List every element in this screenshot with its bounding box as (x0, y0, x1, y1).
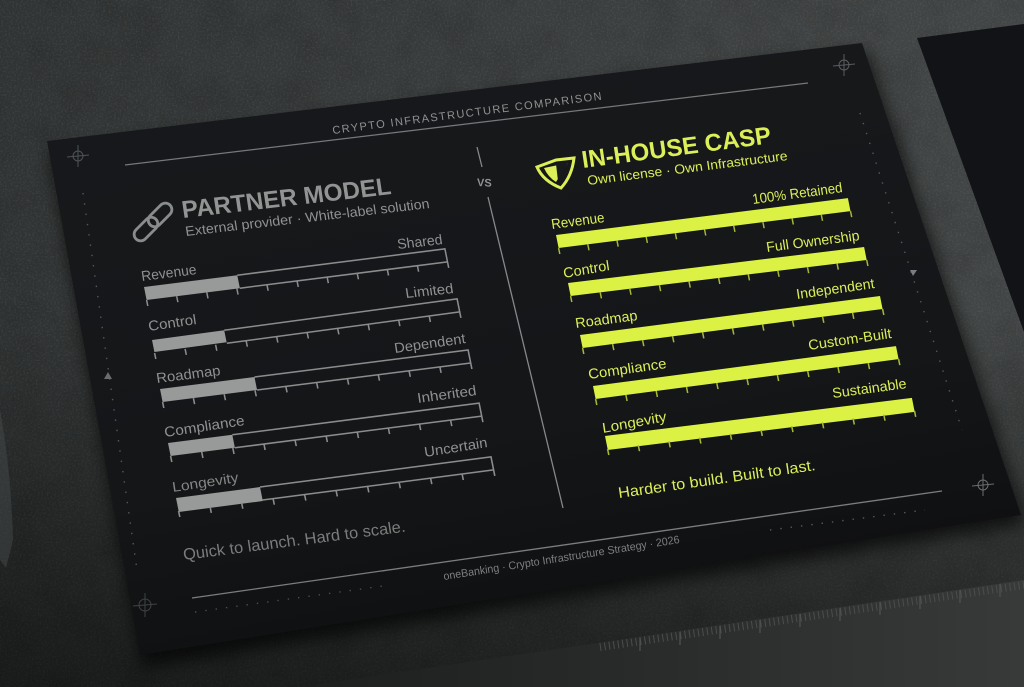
row: revenue (140, 231, 449, 306)
row: compliance: Compliance (587, 355, 668, 382)
icon: chain link (131, 200, 175, 244)
row: revenue: Revenue (550, 209, 606, 232)
row: longevity: Sustainable (831, 375, 908, 401)
row: revenue (550, 179, 852, 254)
VS label: VS (477, 177, 492, 190)
dotted guide right (860, 113, 962, 430)
icon: shield (537, 158, 574, 188)
crosshair bottom right (972, 474, 994, 496)
footer text: oneBanking · Crypto Infrastructure Strategy · 2026 (443, 534, 680, 583)
bottom rule (192, 491, 942, 598)
row: control: Full Ownership (765, 227, 861, 255)
subheading: Own license · Own Infrastructure (586, 148, 788, 188)
dotted guide bottom right (770, 510, 925, 530)
subheading: External provider · White-label solution (184, 196, 430, 239)
heading: partner model: PARTNER MODEL (180, 173, 393, 224)
row: revenue: Revenue (140, 261, 198, 284)
row: compliance: Inherited (416, 382, 477, 406)
crosshair top right (833, 54, 855, 76)
row: control: Control (562, 258, 611, 282)
row: control: Limited (404, 280, 454, 301)
title: CRYPTO INFRASTRUCTURE COMPARISON (332, 91, 603, 137)
marker right (910, 270, 917, 276)
row: control (147, 280, 461, 359)
panel: in-house CASP (537, 122, 916, 502)
second card, top right (917, 24, 1024, 332)
row: roadmap: Roadmap (155, 362, 222, 386)
row: roadmap (155, 330, 472, 408)
row: longevity (171, 435, 495, 517)
row: roadmap: Independent (795, 275, 876, 302)
row: revenue: 100% Retained (751, 179, 843, 207)
row: control (562, 227, 868, 302)
glass object, left edge (0, 410, 13, 568)
row: roadmap (574, 275, 884, 354)
top rule (125, 83, 808, 165)
dotted guide bottom left (195, 586, 383, 612)
row: roadmap: Roadmap (574, 307, 639, 331)
row: compliance: Compliance (163, 412, 246, 440)
row: longevity (601, 375, 916, 455)
row: compliance (587, 325, 900, 405)
row: control: Control (147, 311, 197, 334)
panel: partner model (131, 173, 495, 564)
tagline: harder to build: Harder to build. Built to last. (617, 457, 817, 502)
row: compliance: Custom-Built (807, 325, 893, 353)
VS divider top (477, 147, 482, 167)
tagline: quick to launch: Quick to launch. Hard to scale. (182, 518, 407, 564)
row: roadmap: Dependent (393, 330, 467, 356)
row: longevity: Uncertain (423, 435, 489, 461)
crosshair bottom left (133, 593, 157, 617)
row: longevity: Longevity (601, 409, 669, 437)
row: compliance (163, 382, 483, 462)
marker left (104, 372, 112, 379)
crosshair top left (67, 145, 89, 167)
ruler, bottom right (300, 580, 1024, 687)
row: longevity: Longevity (171, 469, 240, 495)
VS divider bottom (488, 197, 563, 508)
dotted guide left (83, 193, 137, 570)
heading: in-house casp: IN-HOUSE CASP (580, 122, 773, 174)
row: revenue: Shared (396, 231, 443, 252)
